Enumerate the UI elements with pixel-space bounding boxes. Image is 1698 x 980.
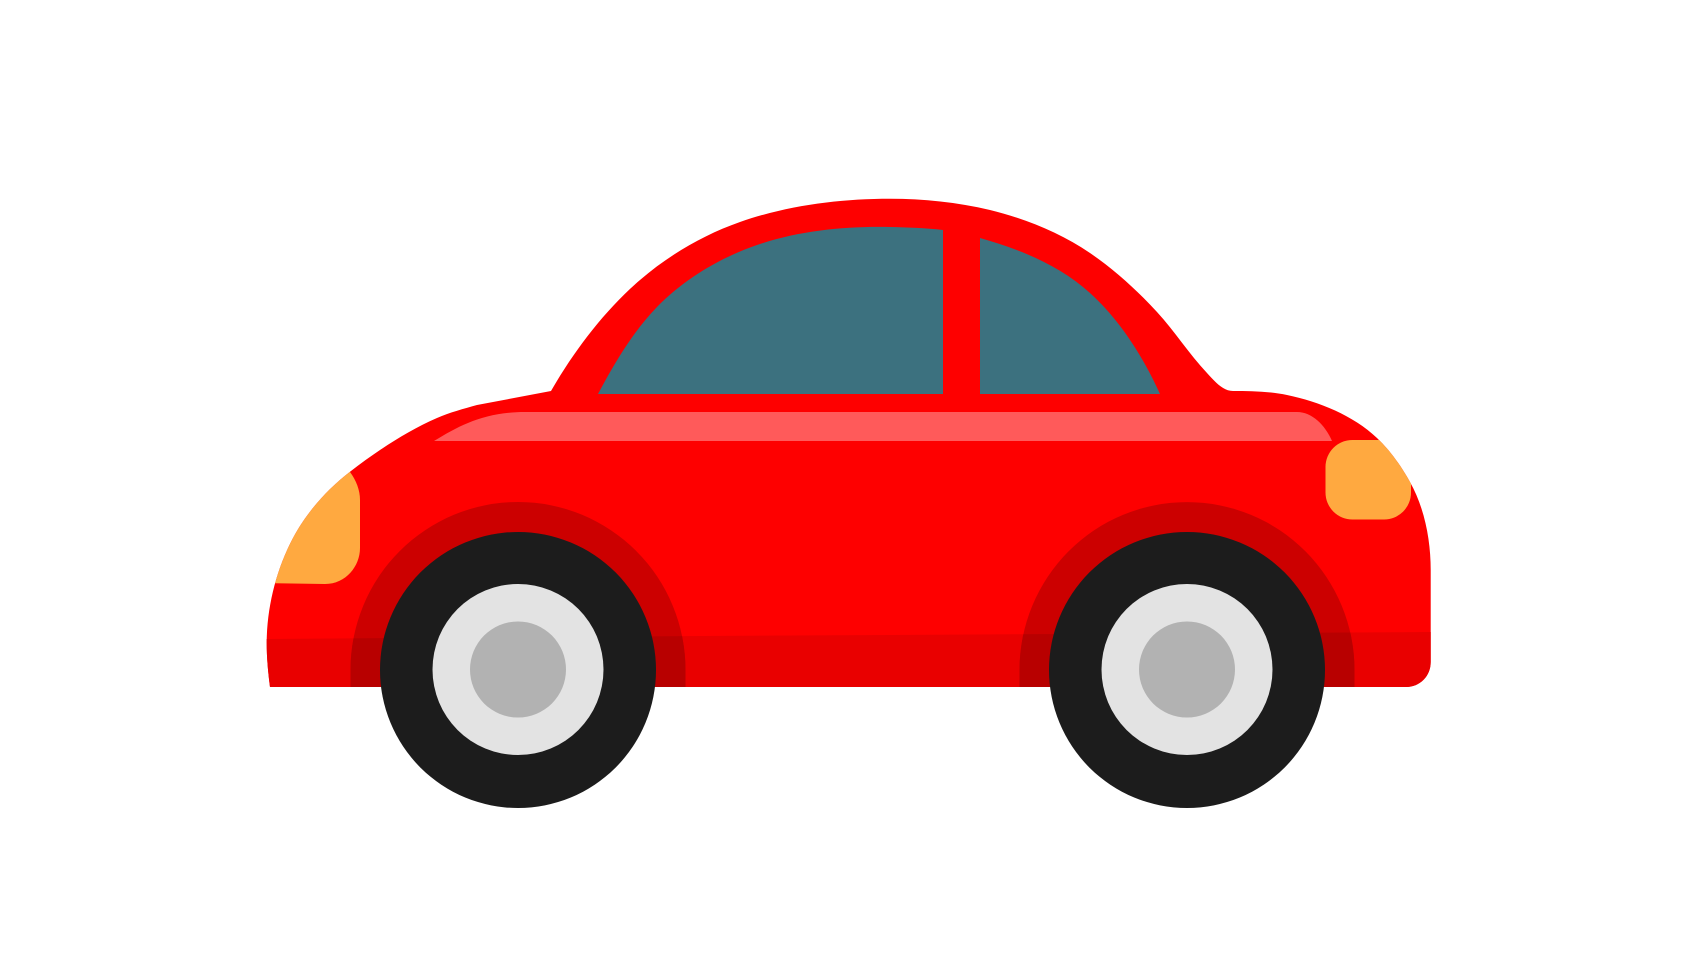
- front window: [598, 227, 943, 394]
- car body: [267, 199, 1431, 687]
- lower body shadow band: [260, 632, 1440, 690]
- illustration: red car: [266, 198, 1431, 808]
- front wheel arch: [350, 502, 686, 687]
- tail light: [1326, 440, 1411, 520]
- rear window: [980, 238, 1160, 394]
- front wheel: [380, 532, 656, 808]
- rear wheel arch: [1020, 502, 1354, 687]
- rear wheel: [1049, 532, 1325, 808]
- body highlight strip: [434, 412, 1332, 441]
- headlight: [275, 472, 360, 584]
